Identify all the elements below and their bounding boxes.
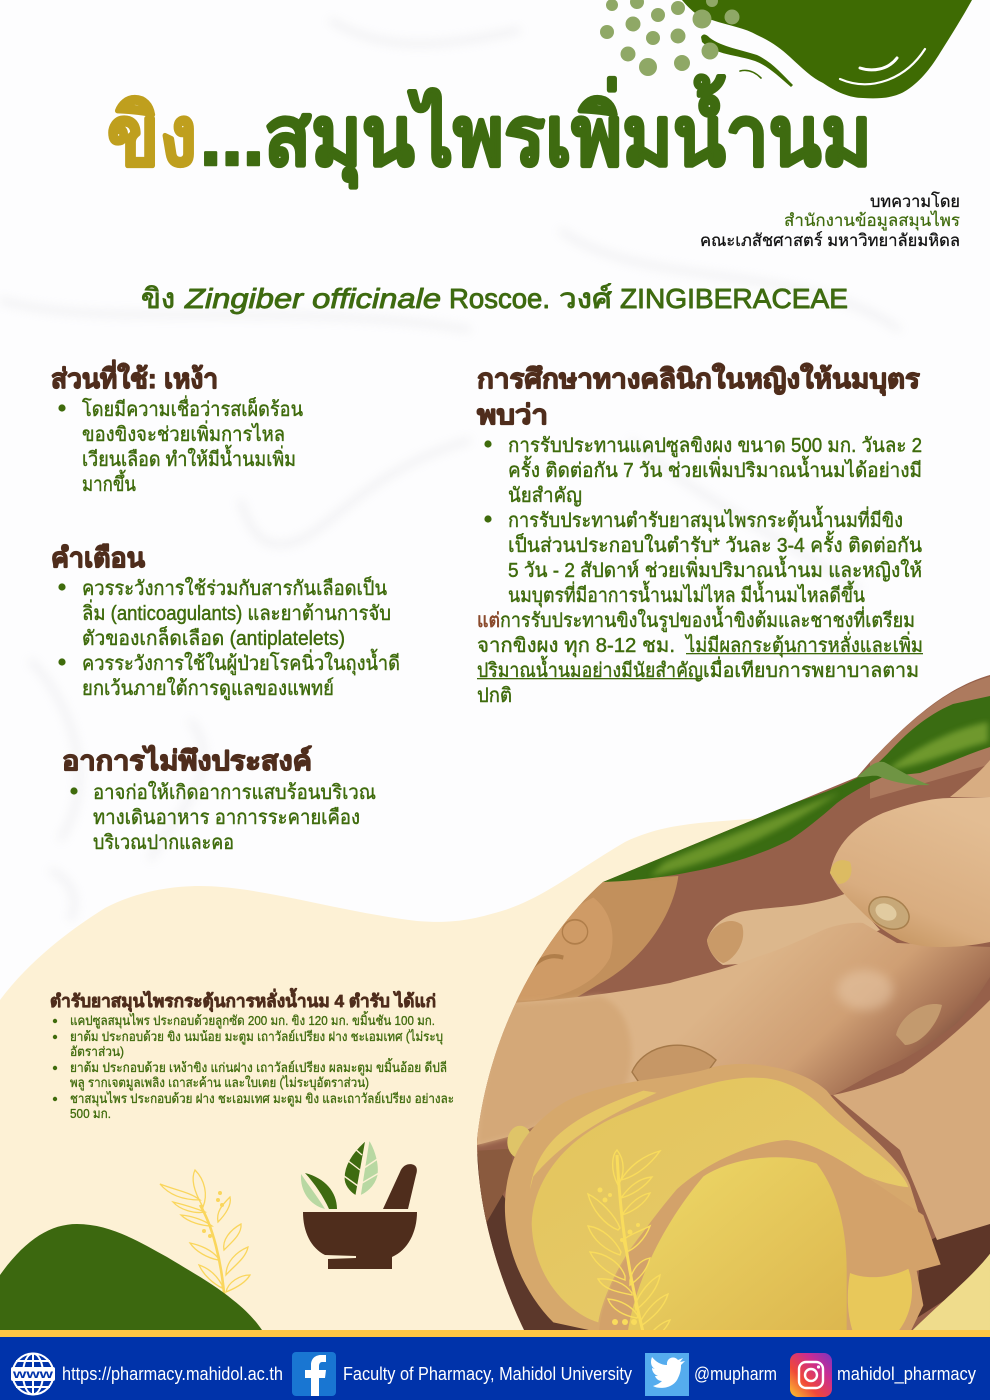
panel: four herbal formulas xyxy=(50,988,454,1121)
heading: clinical studies xyxy=(477,363,920,430)
byline: บทความโดย xyxy=(870,191,960,211)
green hill xyxy=(0,1224,262,1330)
bullet list: warnings xyxy=(58,575,400,701)
subtitle: botanical name: Zingiber officinale xyxy=(184,283,441,314)
footer link: website: https://pharmacy.mahidol.ac.th xyxy=(62,1364,283,1384)
icon: globe www xyxy=(11,1353,55,1395)
bullet list: formulas xyxy=(53,1011,454,1121)
bullet list: formulas: แคปซูลสมุนไพร ประกอบด้วยลูกซัด 200 มก. ขิง 120 มก. ขมิ้นชัน 100 มก. xyxy=(70,1011,435,1029)
bullet list: formulas: ชาสมุนไพร ประกอบด้วย ฝาง ชะเอมเทศ มะตูม ขิง และเถาวัลย์เปรียง อย่างละ xyxy=(70,1091,454,1107)
text block: ginger tea finding xyxy=(477,606,923,707)
bullet list: clinical studies: นัยสำคัญ xyxy=(508,485,582,507)
bullet list: part used: เวียนเลือด ทำให้มีน้ำนมเพิ่ม xyxy=(82,445,296,471)
ginger photo xyxy=(470,670,990,1342)
icon: facebook xyxy=(292,1352,336,1396)
bullet list: adverse effects: ทางเดินอาหาร อาการระคายเคือง xyxy=(93,807,360,829)
byline: สำนักงานข้อมูลสมุนไพร xyxy=(784,210,960,231)
footer link: faculty: Faculty of Pharmacy, Mahidol University xyxy=(343,1364,632,1384)
title: ขิง xyxy=(107,89,197,183)
subtitle: botanical name: Roscoe. xyxy=(449,283,550,314)
text block: ginger tea finding: การรับประทานขิงในรูปของน้ำขิงต้มและชาชงที่เตรียม xyxy=(500,606,915,633)
panel: clinical studies xyxy=(477,363,923,707)
front slice flesh xyxy=(627,1157,847,1340)
bullet list: adverse effects: บริเวณปากและคอ xyxy=(93,832,234,854)
text block: ginger tea finding: จากขิงผง ทุก 8-12 ชม. xyxy=(477,635,675,658)
text block: ginger tea finding: เมื่อเทียบการพยาบาลตาม xyxy=(703,656,919,682)
front slice skin xyxy=(643,1140,941,1330)
panel: adverse effects xyxy=(62,745,376,854)
bullet list: clinical studies xyxy=(484,435,922,608)
heading: warnings: คำเตือน xyxy=(51,543,146,573)
ginger rhizomes, right side xyxy=(477,760,990,1240)
back slice skin xyxy=(505,1064,923,1333)
blob xyxy=(682,0,972,98)
bullet list: clinical studies: ครั้ง ติดต่อกัน 7 วัน ช่วยเพิ่มปริมาณน้ำนมได้อย่างมี xyxy=(508,456,922,482)
text block: ginger tea finding: ไม่มีผลกระตุ้นการหลั่งและเพิ่ม xyxy=(684,631,923,658)
leaf xyxy=(603,696,990,882)
subtitle: botanical name: ขิง xyxy=(141,283,175,314)
curved stroke xyxy=(701,34,793,87)
top right green blob decoration xyxy=(600,0,972,98)
icon: instagram xyxy=(790,1353,832,1397)
bullet list: formulas: 500 มก. xyxy=(70,1106,111,1121)
byline xyxy=(700,191,960,250)
bullet list: formulas: ยาต้ม ประกอบด้วย ขิง นมน้อย มะตูม เถาวัลย์เปรียง ฝาง ชะเอมเทศ (ไม่ระบุ xyxy=(70,1029,443,1045)
bullet list: part used: มากขึ้น xyxy=(82,470,136,496)
subtitle: botanical name xyxy=(141,283,848,314)
bullet list: warnings: ควรระวังการใช้ในผู้ป่วยโรคนิ่วในถุงน้ำดี xyxy=(82,649,400,676)
bullet list: adverse effects: อาจก่อให้เกิดอาการแสบร้อนบริเวณ xyxy=(93,781,376,804)
back slice flesh xyxy=(532,1078,908,1322)
text block: ginger tea finding: แต่ xyxy=(477,610,500,632)
footer link: instagram handle: mahidol_pharmacy xyxy=(837,1364,976,1385)
bullet list: clinical studies: นมบุตรที่มีอาการน้ำนมไม่ไหล มีน้ำนมไหลดีขึ้น xyxy=(508,581,865,608)
bullet list: clinical studies: การรับประทานแคปซูลขิงผง ขนาด 500 มก. วันละ 2 xyxy=(508,435,922,458)
heading: clinical studies: พบว่า xyxy=(477,400,548,430)
bullet list: adverse effects xyxy=(70,781,376,854)
bullet list: clinical studies: เป็นส่วนประกอบในตำรับ* วันละ 3-4 ครั้ง ติดต่อกัน xyxy=(508,531,922,557)
subtitle: botanical name: วงศ์ xyxy=(559,283,612,314)
bullet list: warnings: ควรระวังการใช้ร่วมกับสารกันเลือดเป็น xyxy=(82,575,387,600)
icon: mortar and pestle with leaves xyxy=(301,1139,417,1269)
text block: ginger tea finding: ปริมาณน้ำนมอย่างมีนัยสำคัญ xyxy=(477,656,703,682)
bullet list: warnings: ลิ่ม (anticoagulants) และยาต้านการจับ xyxy=(82,599,391,625)
icon: twitter xyxy=(645,1353,689,1396)
byline: คณะเภสัชศาสตร์ มหาวิทยาลัยมหิดล xyxy=(700,231,960,250)
icon: yellow plant outline xyxy=(160,1170,250,1305)
bullet list: clinical studies: 5 วัน - 2 สัปดาห์ ช่วยเพิ่มปริมาณน้ำนม และหญิงให้ xyxy=(508,556,922,582)
bullet list: part used xyxy=(58,395,303,496)
heading: formulas: ตำรับยาสมุนไพรกระตุ้นการหลั่งน้ำนม 4 ตำรับ ได้แก่ xyxy=(50,988,436,1012)
subtitle: botanical name: ZINGIBERACEAE xyxy=(620,283,848,314)
bullet list: warnings: ยกเว้นภายใต้การดูแลของแพทย์ xyxy=(82,677,334,701)
title xyxy=(107,74,872,189)
bullet list: part used: โดยมีความเชื่อว่ารสเผ็ดร้อน xyxy=(82,395,303,421)
bullet list: warnings: ตัวของเกล็ดเลือด (antiplatelets) xyxy=(82,625,345,650)
bullet list: formulas: พลู รากเจตมูลเพลิง เถาสะค้าน และใบเตย (ไม่ระบุอัตราส่วน) xyxy=(70,1075,369,1091)
heading: part used: ส่วนที่ใช้: เหง้า xyxy=(51,359,218,394)
icon: globe www: www xyxy=(12,1367,54,1381)
ginger slices xyxy=(477,1064,990,1340)
plant outline over photo xyxy=(588,1150,670,1342)
text block: ginger tea finding: ปกติ xyxy=(477,685,512,707)
heading: adverse effects: อาการไม่พึงประสงค์ xyxy=(62,745,312,776)
burlap backdrop and far rhizome xyxy=(470,670,990,1340)
bullet list: clinical studies: การรับประทานตำรับยาสมุนไพรกระตุ้นน้ำนมที่มีขิง xyxy=(508,506,903,533)
cream wave background xyxy=(0,800,990,1336)
bullet list: formulas: อัตราส่วน) xyxy=(70,1044,124,1059)
bullet list: formulas: ยาต้ม ประกอบด้วย เหง้าขิง แก่นฝาง เถาวัลย์เปรียง ผลมะตูม ขมิ้นอ้อย ดีปลี xyxy=(70,1058,447,1076)
panel: part used xyxy=(51,359,303,496)
dots xyxy=(600,0,740,76)
title: ...สมุนไพรเพิ่มน้ำนม xyxy=(200,74,872,189)
bullet list: part used: ของขิงจะช่วยเพิ่มการไหล xyxy=(82,420,285,446)
footer bar xyxy=(0,1330,990,1400)
footer link: twitter handle: @mupharm xyxy=(694,1364,777,1384)
panel: warnings xyxy=(51,543,400,701)
heading: clinical studies: การศึกษาทางคลินิกในหญิงให้นมบุตร xyxy=(477,363,920,396)
